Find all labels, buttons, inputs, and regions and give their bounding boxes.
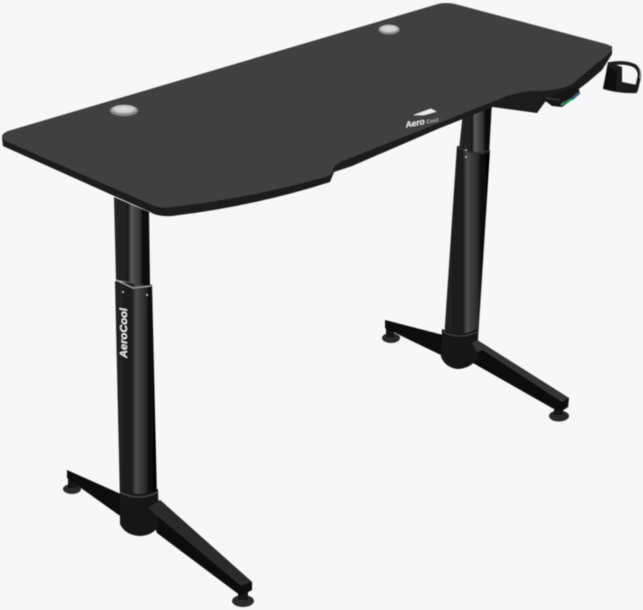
desktop logo: Aero [404, 116, 426, 130]
grommet left [110, 105, 138, 116]
right column joint [458, 148, 490, 153]
left base front arm [148, 500, 252, 596]
right base front arm [472, 340, 569, 411]
left leg logo: AeroCool [118, 307, 130, 359]
control panel [543, 86, 580, 107]
right foot pads [382, 327, 569, 422]
desktop top surface [2, 3, 612, 208]
left leg [63, 197, 254, 607]
left base block [120, 489, 159, 536]
desktop underside and edge [2, 46, 612, 216]
right leg [382, 100, 569, 422]
left base back arm [67, 470, 123, 518]
left column joint [116, 280, 151, 288]
desktop logo: Cool [426, 117, 440, 126]
right upper column [459, 100, 492, 155]
grommet right [378, 24, 400, 34]
desktop logo [402, 108, 440, 130]
left foot pads [63, 477, 254, 607]
right base back arm [385, 320, 443, 356]
left upper column [114, 197, 150, 286]
left lower column [115, 281, 157, 500]
right base block [441, 329, 478, 369]
right lower column [444, 146, 490, 340]
headset hook [603, 62, 641, 93]
